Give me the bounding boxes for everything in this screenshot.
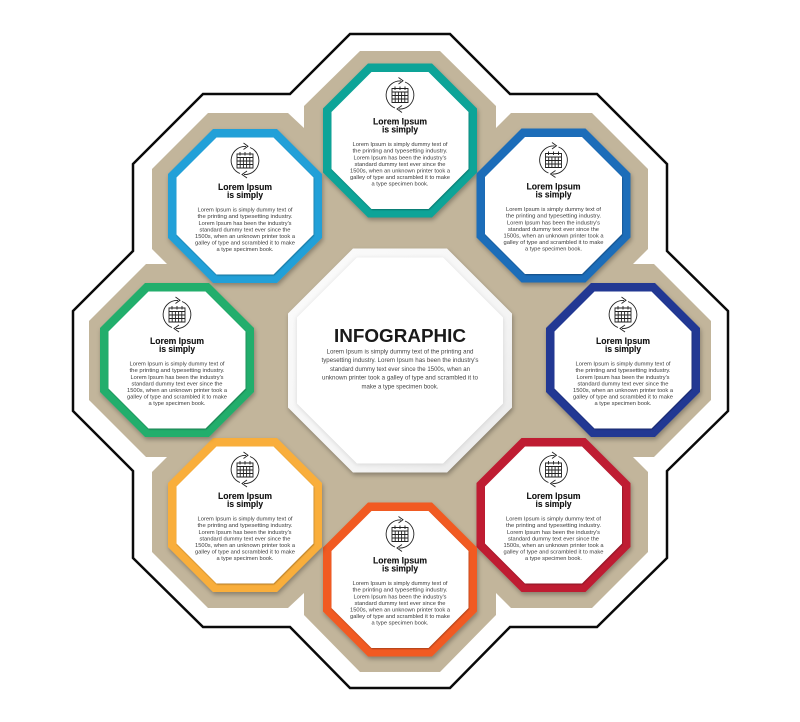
- text block: Lorem Ipsum is simply dummy text of: [198, 208, 293, 214]
- text block: the printing and typesetting industry.: [576, 368, 670, 374]
- panel: card light blue: [168, 129, 322, 283]
- text block: Lorem Ipsum is simply dummy text of: [576, 362, 671, 368]
- heading: [218, 491, 272, 509]
- text block: Lorem Ipsum has been the industry's: [507, 220, 600, 226]
- text block: 1500s, when an unknown printer took a: [127, 388, 227, 394]
- panel: card yellow: [168, 438, 322, 592]
- text block: galley of type and scrambled it to make: [350, 614, 450, 620]
- text block: a type specimen book.: [594, 401, 652, 407]
- text block: galley of type and scrambled it to make: [573, 395, 673, 401]
- text block: a type specimen book.: [216, 247, 274, 253]
- icon: calendar refresh: [231, 143, 259, 178]
- heading: [526, 491, 580, 509]
- heading: [596, 336, 650, 354]
- text block: galley of type and scrambled it to make: [195, 241, 295, 247]
- text block: standard dummy text ever since the: [354, 601, 446, 607]
- icon: calendar refresh: [231, 452, 259, 487]
- text block: the printing and typesetting industry.: [353, 149, 447, 155]
- text block: 1500s, when an unknown printer took a: [195, 234, 295, 240]
- text block: 1500s, when an unknown printer took a: [504, 234, 603, 240]
- text block: Lorem Ipsum is simply dummy text of: [506, 517, 602, 523]
- text block: 1500s, when an unknown printer took a: [195, 543, 295, 549]
- text block: make a type specimen book.: [362, 383, 439, 390]
- text block: galley of type and scrambled it to make: [195, 550, 295, 556]
- text block: 1500s, when an unknown printer took a: [350, 168, 450, 174]
- text block: standard dummy text ever since the 1500s, when an: [330, 366, 470, 373]
- panel: card teal top: [323, 64, 477, 218]
- text block: the printing and typesetting industry.: [506, 523, 601, 529]
- heading: is simply: [605, 344, 642, 354]
- text block: Lorem Ipsum has been the industry's: [576, 375, 670, 381]
- heading: Lorem Ipsum: [596, 336, 650, 346]
- heading: is simply: [227, 499, 264, 509]
- heading: [218, 182, 272, 200]
- text block: standard dummy text ever since the: [577, 381, 669, 387]
- text block: [195, 208, 295, 253]
- text block: [350, 142, 450, 188]
- heading: is simply: [159, 344, 196, 354]
- heading: Lorem Ipsum: [526, 182, 580, 192]
- text block: 1500s, when an unknown printer took a: [573, 388, 673, 394]
- text block: Lorem Ipsum is simply dummy text of: [198, 517, 293, 523]
- text block: Lorem Ipsum is simply dummy text of: [353, 581, 448, 587]
- text block: the printing and typesetting industry.: [198, 523, 292, 529]
- panel: card blue: [476, 128, 630, 282]
- text block: Lorem Ipsum is simply dummy text of the printing and: [326, 348, 474, 356]
- heading: Lorem Ipsum: [150, 336, 204, 346]
- text block: the printing and typesetting industry.: [130, 368, 224, 374]
- icon: calendar refresh: [540, 142, 567, 178]
- text block: standard dummy text ever since the: [199, 227, 291, 233]
- text block: [350, 581, 450, 627]
- icon: calendar refresh: [163, 297, 191, 332]
- text block: galley of type and scrambled it to make: [504, 550, 604, 556]
- heading: is simply: [382, 124, 419, 134]
- text block: a type specimen book.: [372, 621, 428, 627]
- text block: Lorem Ipsum has been the industry's: [130, 375, 224, 381]
- panel: centre octagon: [288, 248, 512, 472]
- panel: card red: [476, 438, 630, 592]
- heading: [150, 336, 204, 354]
- heading: Lorem Ipsum: [373, 117, 427, 127]
- tan backing shape: [89, 51, 711, 672]
- text block: standard dummy text ever since the: [131, 381, 223, 387]
- text block: Lorem Ipsum is simply dummy text of: [130, 362, 225, 368]
- icon: calendar refresh: [386, 78, 414, 112]
- icon: calendar refresh: [540, 452, 567, 487]
- text block: 1500s, when an unknown printer took a: [350, 608, 450, 614]
- heading: [526, 182, 580, 199]
- text block: the printing and typesetting industry.: [506, 214, 601, 220]
- heading: Lorem Ipsum: [218, 491, 272, 501]
- text block: a type specimen book.: [525, 247, 582, 253]
- heading: Lorem Ipsum: [218, 182, 272, 192]
- text block: standard dummy text ever since the: [199, 536, 291, 542]
- text block: typesetting industry. Lorem Ipsum has been the industry's: [322, 357, 479, 364]
- text block: standard dummy text ever since the: [508, 227, 599, 233]
- text block: unknown printer took a galley of type and scrambled it to: [322, 375, 478, 382]
- text block: galley of type and scrambled it to make: [504, 240, 604, 246]
- text block: the printing and typesetting industry.: [353, 588, 447, 594]
- text block: standard dummy text ever since the: [508, 536, 599, 542]
- icon: calendar refresh: [609, 297, 637, 332]
- text block: [127, 362, 227, 407]
- text block: a type specimen book.: [216, 556, 274, 562]
- text block: 1500s, when an unknown printer took a: [504, 543, 603, 549]
- heading: is simply: [536, 189, 572, 199]
- text block: [504, 207, 604, 253]
- text block: the printing and typesetting industry.: [198, 214, 292, 220]
- text block: [504, 517, 604, 562]
- black outer outline: [73, 34, 728, 688]
- text block: [195, 517, 295, 562]
- heading: Lorem Ipsum: [526, 491, 580, 501]
- text block: a type specimen book.: [148, 401, 206, 407]
- icon: calendar refresh: [386, 516, 414, 552]
- title: INFOGRAPHIC: [334, 325, 466, 346]
- text block: galley of type and scrambled it to make: [127, 395, 227, 401]
- text block: standard dummy text ever since the: [354, 162, 446, 168]
- text block: a type specimen book.: [525, 556, 582, 562]
- text block: [322, 348, 479, 390]
- heading: [373, 556, 427, 573]
- text block: galley of type and scrambled it to make: [350, 175, 450, 181]
- text block: Lorem Ipsum is simply dummy text of: [353, 142, 448, 148]
- heading: Lorem Ipsum: [373, 556, 427, 566]
- heading: is simply: [227, 190, 264, 200]
- text block: Lorem Ipsum has been the industry's: [354, 594, 447, 600]
- heading: is simply: [536, 499, 572, 509]
- text block: a type specimen book.: [372, 182, 428, 188]
- text block: Lorem Ipsum has been the industry's: [354, 155, 447, 161]
- text block: Lorem Ipsum has been the industry's: [198, 221, 292, 227]
- text block: Lorem Ipsum is simply dummy text of: [506, 207, 602, 213]
- heading: [373, 117, 427, 134]
- panel: card green: [100, 283, 254, 437]
- text block: Lorem Ipsum has been the industry's: [507, 530, 600, 536]
- text block: Lorem Ipsum has been the industry's: [198, 530, 292, 536]
- panel: card navy: [546, 283, 700, 437]
- panel: card orange: [323, 502, 477, 656]
- text block: [573, 362, 673, 407]
- heading: is simply: [382, 563, 419, 573]
